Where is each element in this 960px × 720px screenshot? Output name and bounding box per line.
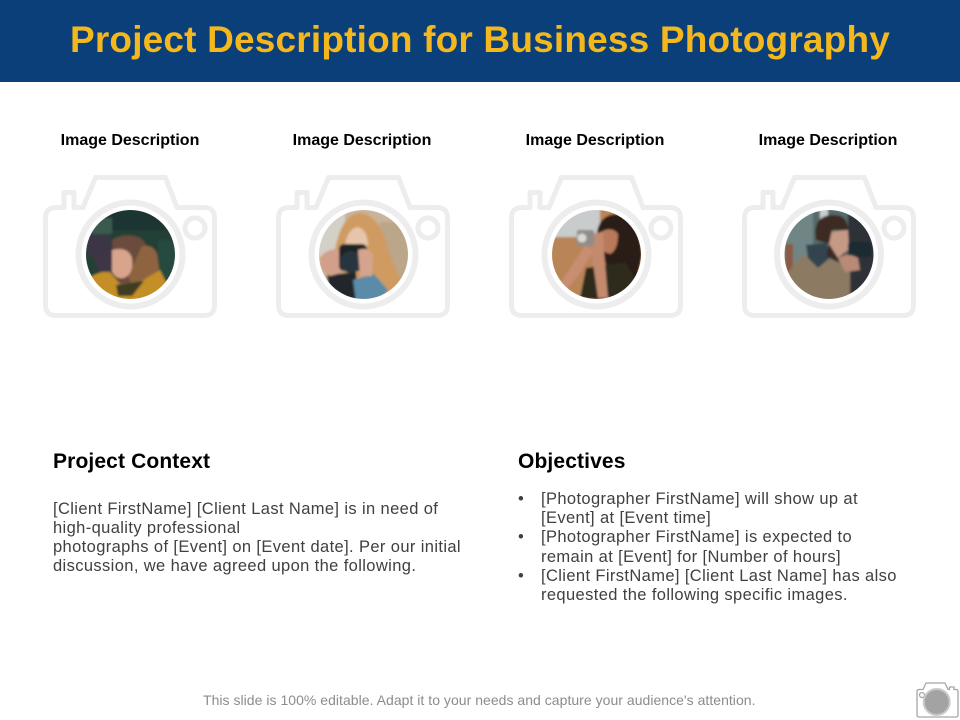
icon: camera 3 — [512, 178, 680, 316]
text: project context body: high-quality professional — [53, 519, 240, 537]
list: objectives: remain at [Event] for [Number of hours] — [541, 548, 841, 566]
icon: camera 2 — [278, 178, 448, 316]
label: image 2: Image Description — [293, 132, 431, 149]
icon: camera 1 — [46, 178, 214, 316]
list: objectives: • — [518, 490, 524, 508]
label: image 1: Image Description — [61, 132, 199, 149]
text: project context body: photographs of [Event] on [Event date]. Per our initial — [53, 538, 461, 556]
list: objectives: requested the following specific images. — [541, 586, 848, 604]
list: objectives: [Event] at [Event time] — [541, 509, 711, 527]
camera photo gallery — [43, 175, 916, 318]
heading: project context: Project Context — [53, 450, 210, 473]
title banner — [0, 0, 960, 82]
label: image 3: Image Description — [526, 132, 664, 149]
heading: objectives: Objectives — [518, 450, 626, 473]
list: objectives: [Photographer FirstName] will show up at — [541, 490, 858, 508]
icon: camera 4 — [744, 178, 914, 316]
photo 1: photographer in yellow jacket — [86, 210, 175, 299]
panel: project context — [53, 450, 461, 575]
photo 4: man with camera — [784, 210, 874, 299]
list: objectives: [Photographer FirstName] is expected to — [541, 528, 852, 546]
panel: objectives — [518, 450, 897, 604]
footer note: This slide is 100% editable. Adapt it to your needs and capture your audience's attention. — [203, 692, 756, 708]
title: Project Description for Business Photography — [70, 19, 890, 60]
photo 2: blonde photographer — [319, 210, 408, 299]
text: project context body — [53, 500, 461, 575]
list: objectives — [518, 490, 897, 604]
text: project context body: [Client FirstName] [Client Last Name] is in need of — [53, 500, 438, 518]
label: image 4: Image Description — [759, 132, 897, 149]
text: project context body: discussion, we have agreed upon the following. — [53, 557, 416, 575]
list: objectives: • — [518, 567, 524, 585]
list: objectives: [Client FirstName] [Client Last Name] has also — [541, 567, 897, 585]
list: objectives: • — [518, 528, 524, 546]
photo 3: woman with vintage camera — [552, 210, 641, 299]
icon: footer camera — [916, 682, 959, 718]
